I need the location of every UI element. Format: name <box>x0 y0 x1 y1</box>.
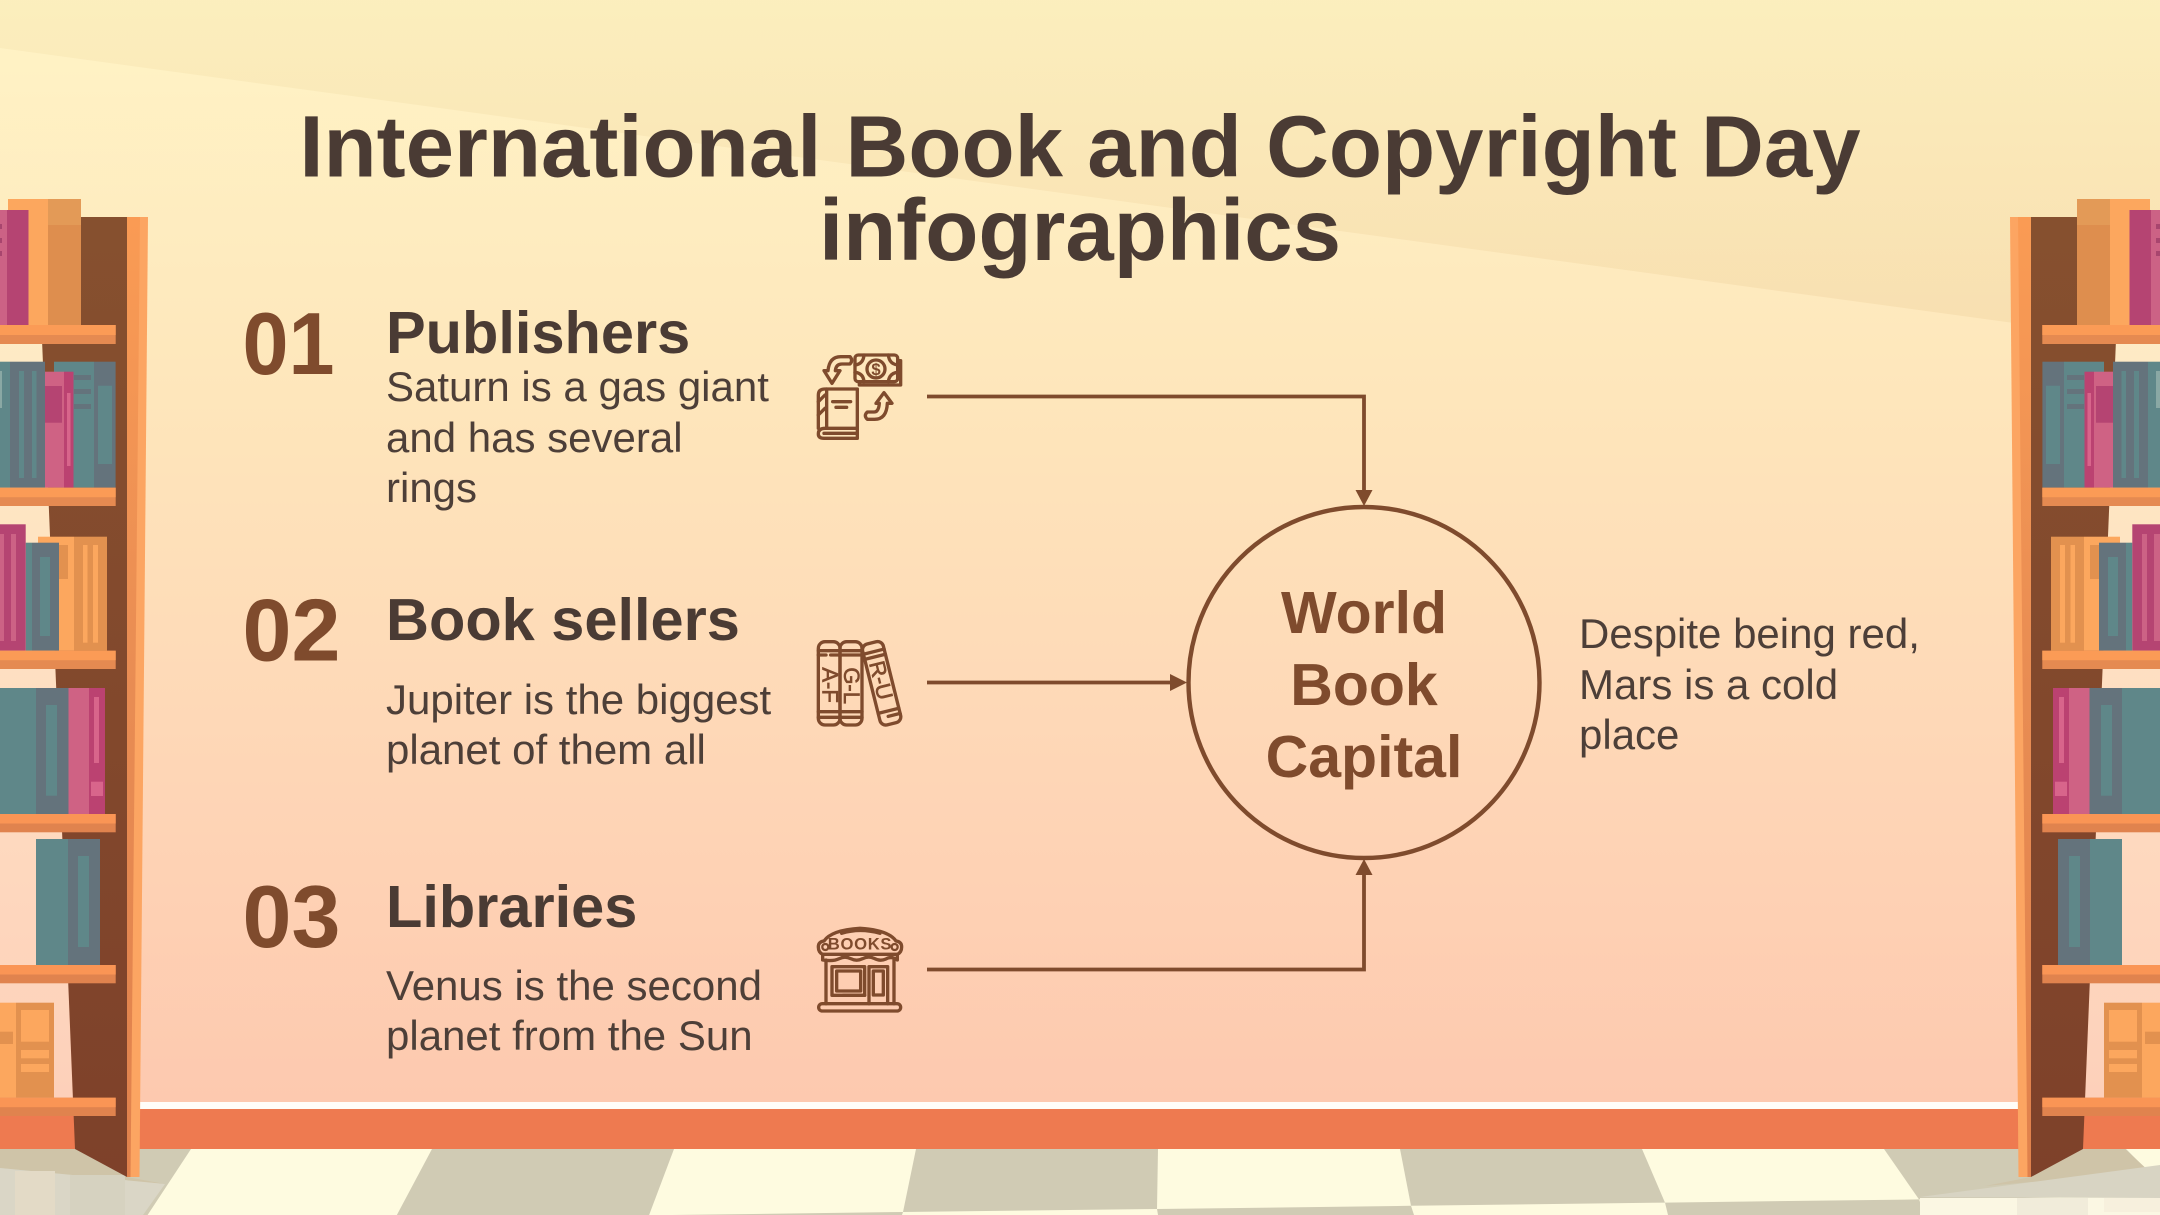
text: publishers description: Saturn is a gas giant <box>386 363 769 410</box>
floor reflection left <box>0 1149 165 1215</box>
text: book sellers description: Jupiter is the biggest <box>386 676 772 723</box>
title: International Book and Copyright Day <box>299 98 1861 196</box>
shelf side panel <box>127 217 148 1177</box>
text: mars description: place <box>1579 711 1679 758</box>
circle: world book capital: World <box>1281 580 1447 646</box>
arrow: libraries to center <box>927 859 1372 970</box>
books row 4 <box>0 688 105 814</box>
text: book sellers description: planet of them all <box>386 726 706 773</box>
floor reflection right <box>1920 1149 2160 1215</box>
arrow: publishers to center <box>927 396 1372 506</box>
icon: book and money exchange: $ <box>871 360 881 379</box>
number 03: 03 <box>242 867 340 966</box>
item 01: publishers <box>242 294 769 511</box>
baseboard <box>0 1102 2160 1149</box>
title: infographics <box>819 182 1341 279</box>
text: libraries description <box>386 962 762 1059</box>
arrow: book sellers to center <box>927 674 1187 691</box>
shelf boards <box>0 325 116 1116</box>
item 03: libraries <box>242 867 762 1059</box>
heading: book sellers: Book sellers <box>386 586 740 653</box>
icon: alphabetized books: A-F <box>818 667 843 703</box>
text: mars description: Despite being red, <box>1579 610 1920 657</box>
bookshelf left <box>0 199 148 1177</box>
text: publishers description <box>386 363 769 511</box>
item 02: book sellers <box>242 580 772 773</box>
text: mars description: Mars is a cold <box>1579 661 1838 708</box>
heading: libraries: Libraries <box>386 873 637 940</box>
books row 3 <box>0 524 107 651</box>
icon: alphabetized books: R-U <box>864 658 898 702</box>
icon: bookstore: BOOKS <box>828 935 892 954</box>
checkered floor <box>0 1149 2160 1215</box>
icon: alphabetized books <box>818 640 904 727</box>
shelf interior <box>0 217 73 1109</box>
bookshelf right <box>2010 199 2160 1177</box>
books row 2 <box>0 362 116 488</box>
icon: bookstore <box>818 928 902 1011</box>
text: libraries description: planet from the Sun <box>386 1012 753 1059</box>
circle: world book capital: Book <box>1290 652 1438 718</box>
books row 5 <box>36 839 100 965</box>
text: publishers description: and has several <box>386 414 683 461</box>
number 01: 01 <box>242 294 334 393</box>
books row 6 <box>0 1003 54 1098</box>
number 02: 02 <box>242 580 340 680</box>
title <box>299 98 1861 279</box>
text: book sellers description <box>386 676 772 773</box>
circle: world book capital <box>1188 507 1540 858</box>
icon: book and money exchange <box>818 355 901 438</box>
heading: publishers: Publishers <box>386 299 690 366</box>
text: libraries description: Venus is the second <box>386 962 762 1009</box>
circle: world book capital: Capital <box>1266 724 1462 790</box>
shelf back panel <box>37 217 127 1177</box>
books row 1 <box>0 199 81 325</box>
icon: alphabetized books: G-L <box>839 667 864 704</box>
text: mars description <box>1579 610 1920 758</box>
text: publishers description: rings <box>386 464 477 511</box>
